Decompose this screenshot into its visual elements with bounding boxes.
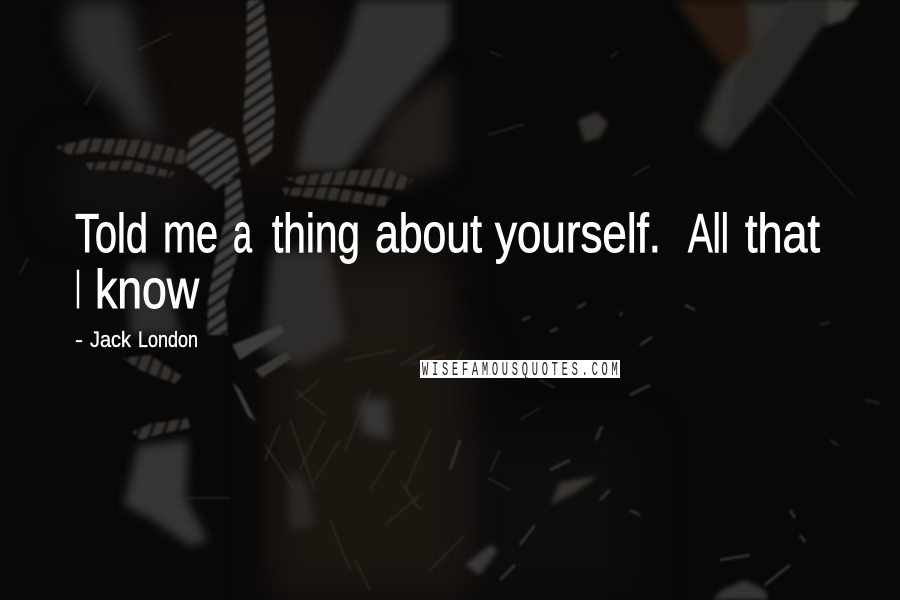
left forearm [66,0,158,138]
quote text: Told [75,202,148,264]
central light patch [358,400,390,440]
rope: lower loops [122,355,182,384]
quote text: All [688,202,729,264]
quote text: thing [272,202,360,264]
rope: loose strands [232,382,256,422]
dark brown wash [60,0,640,600]
rope: vertical lower [207,178,245,335]
rope: vertical upper [243,0,275,170]
upper right arm [700,0,840,150]
site watermark badge: WISEFAMOUSQUOTES.COM [422,359,618,381]
lower centre arm [290,470,315,530]
author attribution: London [138,327,198,352]
quote text: about [375,202,482,264]
rope: knot [185,128,240,190]
rope: left loops [55,138,185,165]
small pale patch [578,112,608,142]
quote text: that [745,202,820,264]
author attribution: - [75,327,83,352]
quote text: yourself. [495,202,661,264]
ropes [55,0,413,440]
quote text: me [163,202,218,264]
author attribution [75,327,198,352]
central forearm [296,0,450,170]
lower forearm [124,440,208,546]
behind-text light areas [128,262,180,335]
quote text: know [95,258,199,320]
author attribution: Jack [90,327,132,352]
rope: right loops [285,168,413,190]
quote text: I [75,258,81,320]
quote text: a [233,202,252,264]
quote text [75,202,820,320]
